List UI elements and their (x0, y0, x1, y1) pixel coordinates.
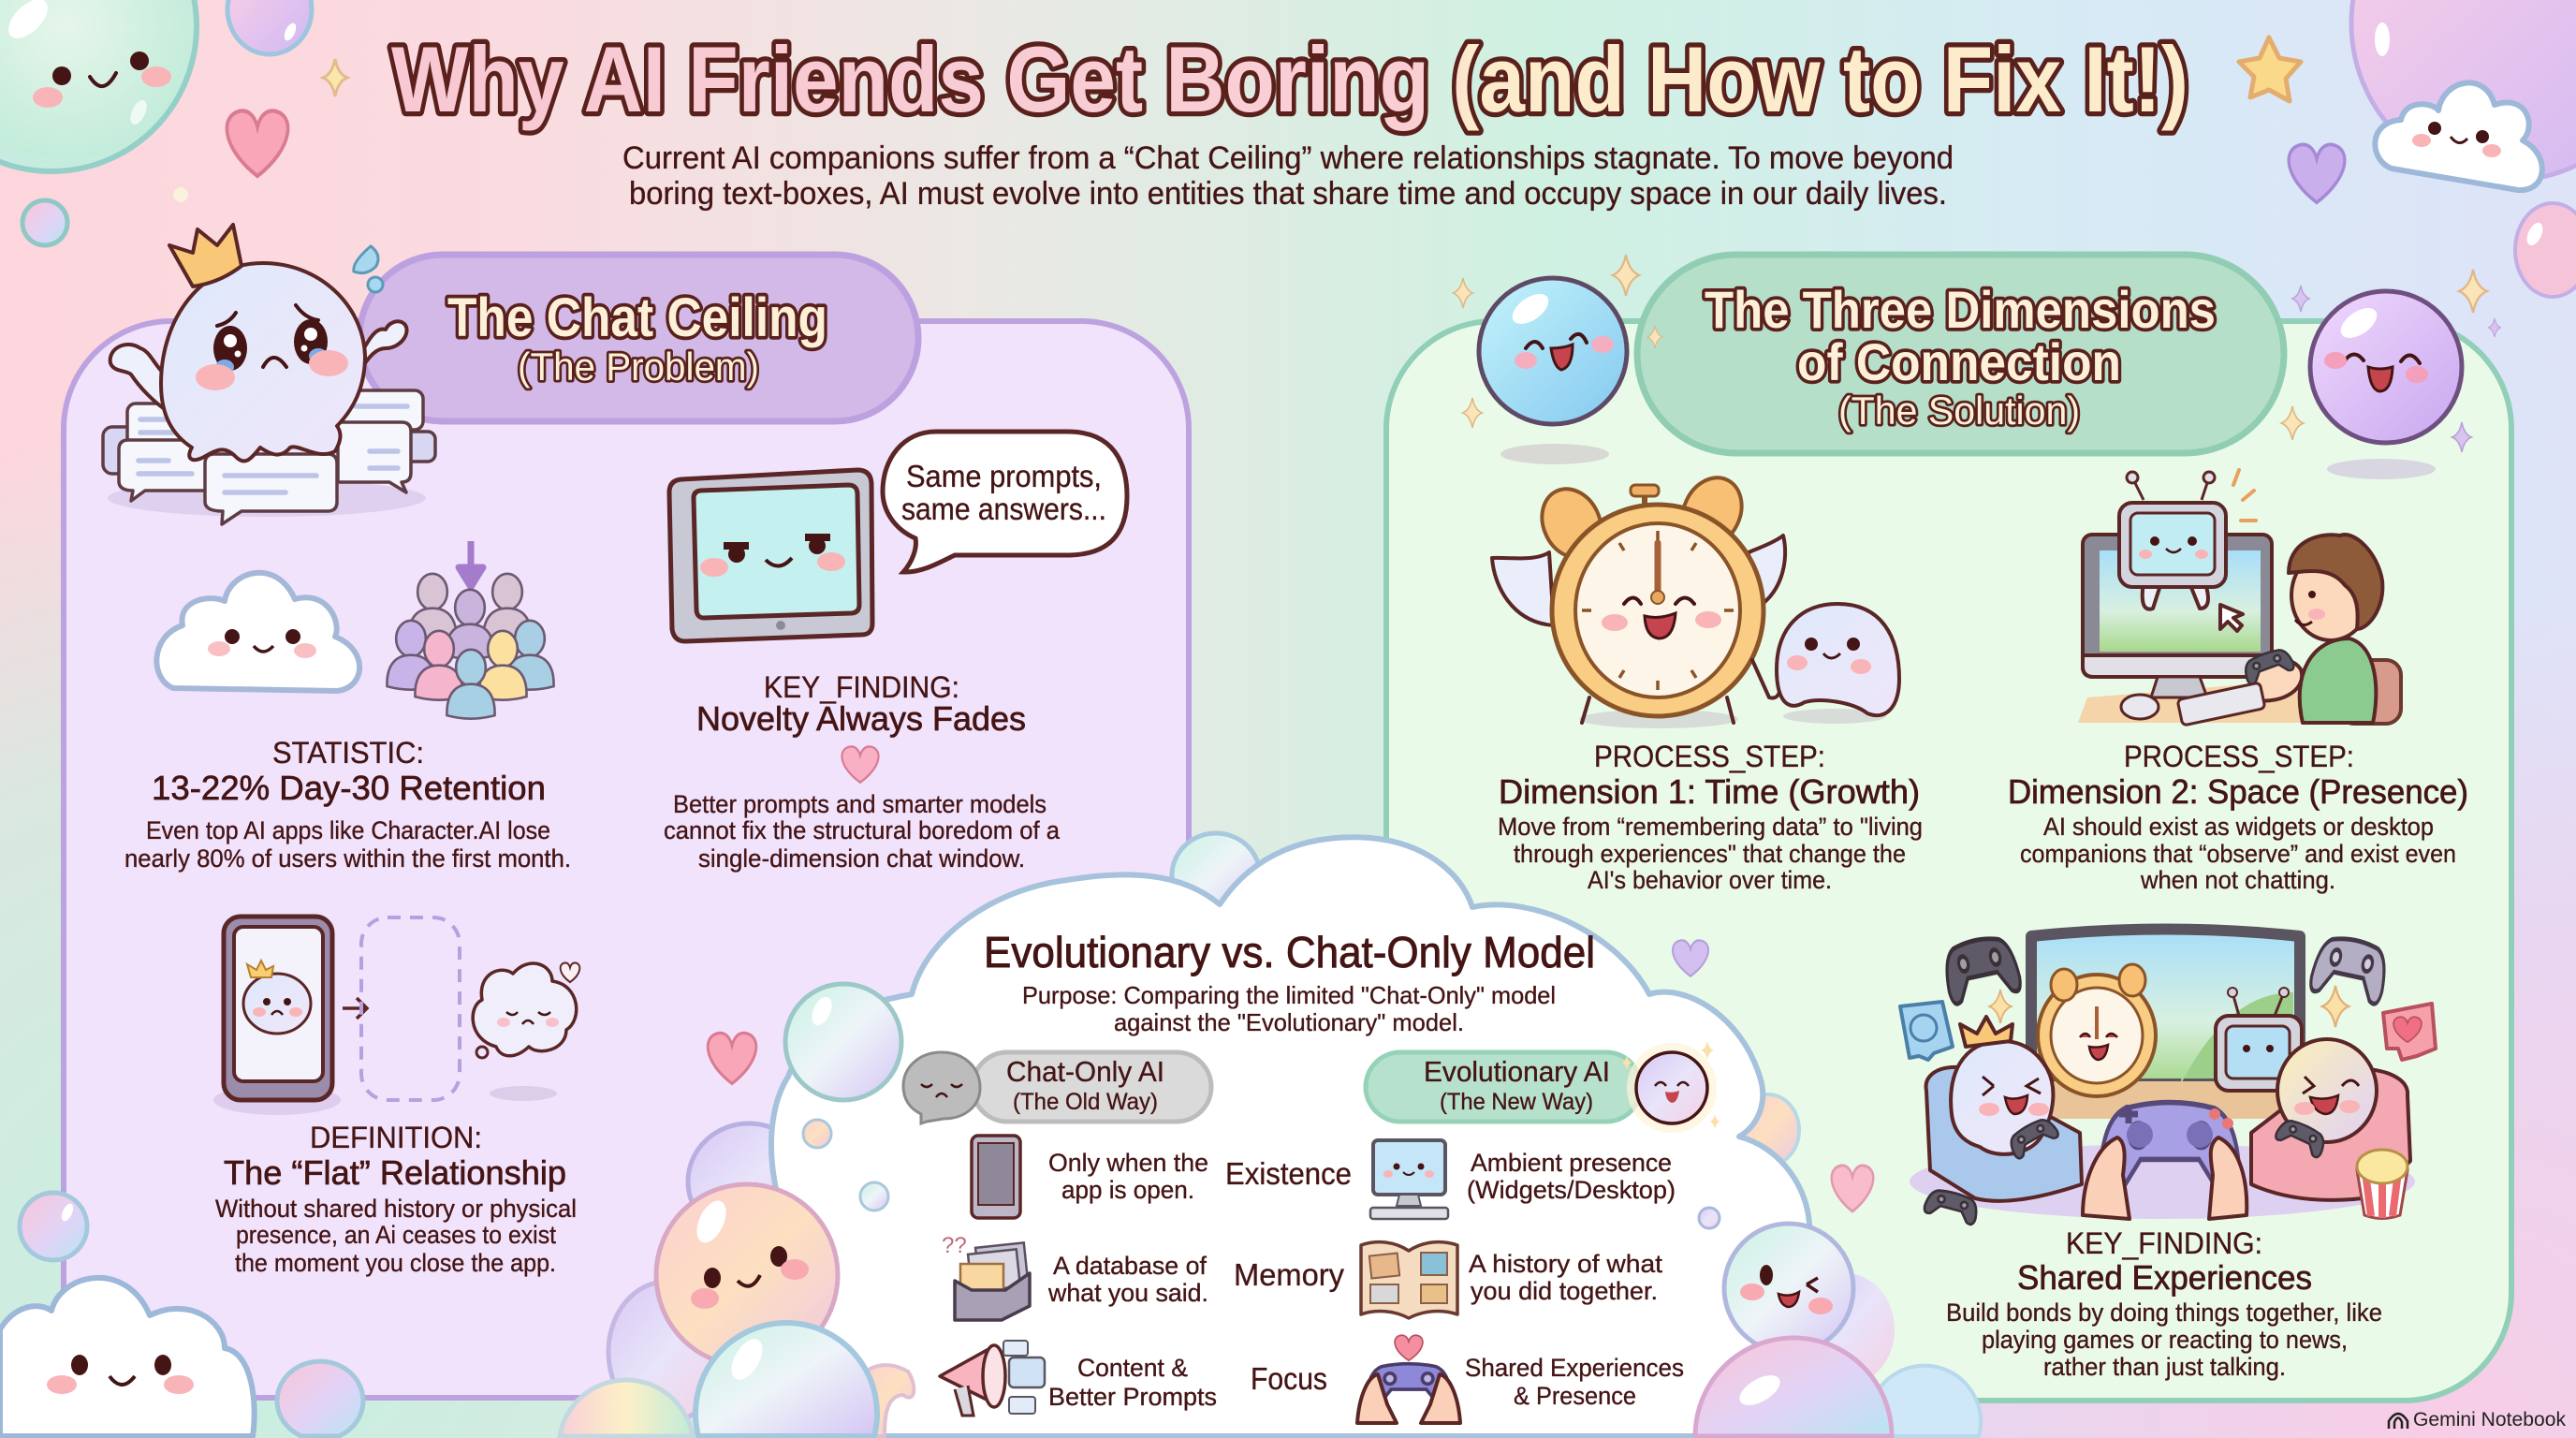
icon: crowd of users (387, 574, 554, 719)
text block: statistic: 13-22% Day-30 Retention (152, 769, 546, 807)
cloud purpose text: Purpose: Comparing the limited "Chat-Only" model (1022, 981, 1556, 1009)
text block: dimension 1: through experiences" that change the (1514, 840, 1906, 868)
row: focus: Content & (1077, 1354, 1188, 1382)
text block: statistic: nearly 80% of users within the first month. (124, 844, 571, 873)
panel heading: three dimensions: (The Solution) (1838, 389, 2080, 433)
panel heading: the chat ceiling (359, 255, 918, 421)
sparkles around bubbles (1454, 255, 2501, 452)
text block: dimension 2: companions that “observe” and exist even (2020, 840, 2456, 868)
text block: dimension 1: AI's behavior over time. (1588, 866, 1832, 894)
cloud heading: Evolutionary vs. Chat-Only Model (984, 928, 1595, 976)
row: existence: Only when the (1048, 1149, 1208, 1177)
illustration: friends gaming together (1900, 929, 2436, 1225)
text block: dimension 1: Dimension 1: Time (Growth) (1499, 772, 1920, 811)
speech bubble: same prompts (883, 432, 1127, 572)
text block: dimension 1: PROCESS_STEP: (1594, 740, 1825, 773)
bubble behind cloud (608, 833, 1895, 1422)
icon: file box: ?? (942, 1233, 967, 1258)
row: focus: Better Prompts (1048, 1383, 1217, 1411)
top-left decorations (0, 0, 347, 245)
bottom-left bubbles and cloud (0, 984, 914, 1436)
icon: sad thought cloud (473, 962, 579, 1101)
text block: definition: the moment you close the app. (235, 1249, 556, 1277)
row: memory (942, 1233, 1663, 1320)
text block: key finding novelty: single-dimension chat window. (698, 844, 1025, 873)
row: memory: you did together. (1471, 1277, 1658, 1305)
icon: phone (972, 1136, 1020, 1218)
panel heading: three dimensions: The Three Dimensions (1705, 280, 2216, 339)
pill: evolutionary AI (1366, 1052, 1641, 1122)
panel: the chat ceiling (64, 225, 1189, 1398)
text block: dimension 1 (1498, 740, 1923, 894)
text block: statistic (124, 736, 571, 873)
text block: dimension 2: Dimension 2: Space (Presence) (2008, 772, 2468, 811)
text block: shared experiences: playing games or reacting to news, (1982, 1326, 2348, 1354)
panel heading: three dimensions: of Connection (1797, 332, 2121, 391)
text block: dimension 1: Move from “remembering data” to "living (1498, 813, 1923, 841)
icon: desktop computer (1370, 1140, 1448, 1219)
row: focus: Focus (1251, 1361, 1327, 1396)
text block: statistic: STATISTIC: (272, 736, 424, 770)
icon: down arrow (459, 541, 483, 587)
row: memory: Memory (1234, 1257, 1344, 1292)
pill: chat-only AI: (The Old Way) (1013, 1089, 1158, 1115)
row: focus: Shared Experiences (1465, 1354, 1684, 1382)
icon: grey sad chat bubble (903, 1052, 980, 1123)
watermark: gemini notebook: Gemini Notebook (2413, 1409, 2566, 1431)
decorative hearts near cloud (708, 940, 1873, 1211)
pill: evolutionary AI: (The New Way) (1440, 1089, 1593, 1115)
row: memory: A database of (1053, 1252, 1207, 1280)
text block: key finding novelty: Better prompts and smarter models (673, 790, 1046, 818)
panel heading: three dimensions (1637, 255, 2284, 453)
icon: heart (842, 746, 879, 783)
icon: person at computer with AI buddy (2078, 470, 2401, 726)
row: existence: app is open. (1061, 1176, 1194, 1204)
text block: key finding novelty: KEY_FINDING: (764, 670, 959, 704)
subtitle (622, 140, 1954, 212)
row: existence: (Widgets/Desktop) (1467, 1176, 1676, 1204)
text block: statistic: Even top AI apps like Character.AI lose (146, 816, 550, 844)
text block: key finding novelty: cannot fix the structural boredom of a (664, 816, 1061, 844)
text block: dimension 2 (2008, 740, 2468, 894)
icon: megaphone with chat bubbles (940, 1341, 1045, 1416)
row: focus: & Presence (1514, 1382, 1636, 1410)
pill: chat-only AI (973, 1052, 1211, 1122)
text block: key finding novelty: Novelty Always Fades (696, 699, 1026, 738)
pill: chat-only AI: Chat-Only AI (1006, 1055, 1164, 1088)
icon: file box (942, 1233, 1030, 1320)
text block: dimension 2: AI should exist as widgets or desktop (2043, 813, 2434, 841)
icon: purple bubble character (2310, 291, 2462, 479)
panel heading: the chat ceiling: (The Problem) (518, 345, 759, 389)
row: memory: A history of what (1469, 1250, 1663, 1278)
title: Why AI Friends Get Boring (and How to Fix It!) (391, 27, 2188, 131)
text block: definition: Without shared history or physical (215, 1195, 577, 1223)
text block: definition: DEFINITION: (310, 1121, 482, 1154)
subtitle: Current AI companions suffer from a “Chat Ceiling” where relationships stagnate. To move beyond (622, 140, 1954, 176)
row: focus (940, 1335, 1684, 1423)
cloud purpose text: against the "Evolutionary" model. (1114, 1008, 1464, 1036)
icon: happy glowing bubble (1622, 1041, 1720, 1133)
text block: shared experiences: KEY_FINDING: (2066, 1226, 2262, 1260)
text block: dimension 2: when not chatting. (2140, 866, 2335, 894)
icon: hands with game controller (1357, 1335, 1460, 1423)
icon: photo album (1361, 1242, 1457, 1318)
icon: alarm clock with wings and friend (1492, 468, 1899, 728)
row: existence: Ambient presence (1471, 1149, 1672, 1177)
panel: evolutionary vs chat-only cloud (771, 837, 1825, 1436)
text block: shared experiences: rather than just talking. (2043, 1353, 2286, 1381)
icon: phone vanishing (213, 917, 460, 1115)
bottom-right bubbles (1695, 1208, 1981, 1436)
top-right decorations (2239, 0, 2576, 297)
cloud purpose text (1022, 981, 1556, 1036)
text block: definition: presence, an Ai ceases to exist (236, 1221, 556, 1249)
text block: definition (215, 1121, 577, 1277)
row: existence: Existence (1225, 1156, 1352, 1191)
panel heading: the chat ceiling: The Chat Ceiling (447, 287, 827, 348)
text block: key finding novelty (664, 670, 1061, 873)
icon: sad ghost on chat pile (103, 225, 435, 524)
text block: shared experiences (1946, 1226, 2382, 1381)
speech bubble: same prompts: same answers... (901, 492, 1106, 526)
pill: evolutionary AI: Evolutionary AI (1424, 1055, 1610, 1088)
text block: dimension 2: PROCESS_STEP: (2124, 740, 2354, 773)
text block: definition: The “Flat” Relationship (224, 1153, 566, 1192)
icon: smiling cloud (156, 573, 359, 691)
subtitle: boring text-boxes, AI must evolve into entities that share time and occupy space in our daily lives. (629, 176, 1947, 212)
text block: shared experiences: Build bonds by doing things together, like (1946, 1299, 2382, 1327)
icon: blue bubble character (1479, 278, 1627, 464)
icon: tablet with bored face (669, 470, 872, 641)
panel: three dimensions of connection (1386, 255, 2511, 1401)
row: existence (972, 1136, 1676, 1219)
speech bubble: same prompts: Same prompts, (906, 459, 1102, 493)
text block: shared experiences: Shared Experiences (2017, 1258, 2312, 1297)
row: memory: what you said. (1047, 1279, 1208, 1307)
